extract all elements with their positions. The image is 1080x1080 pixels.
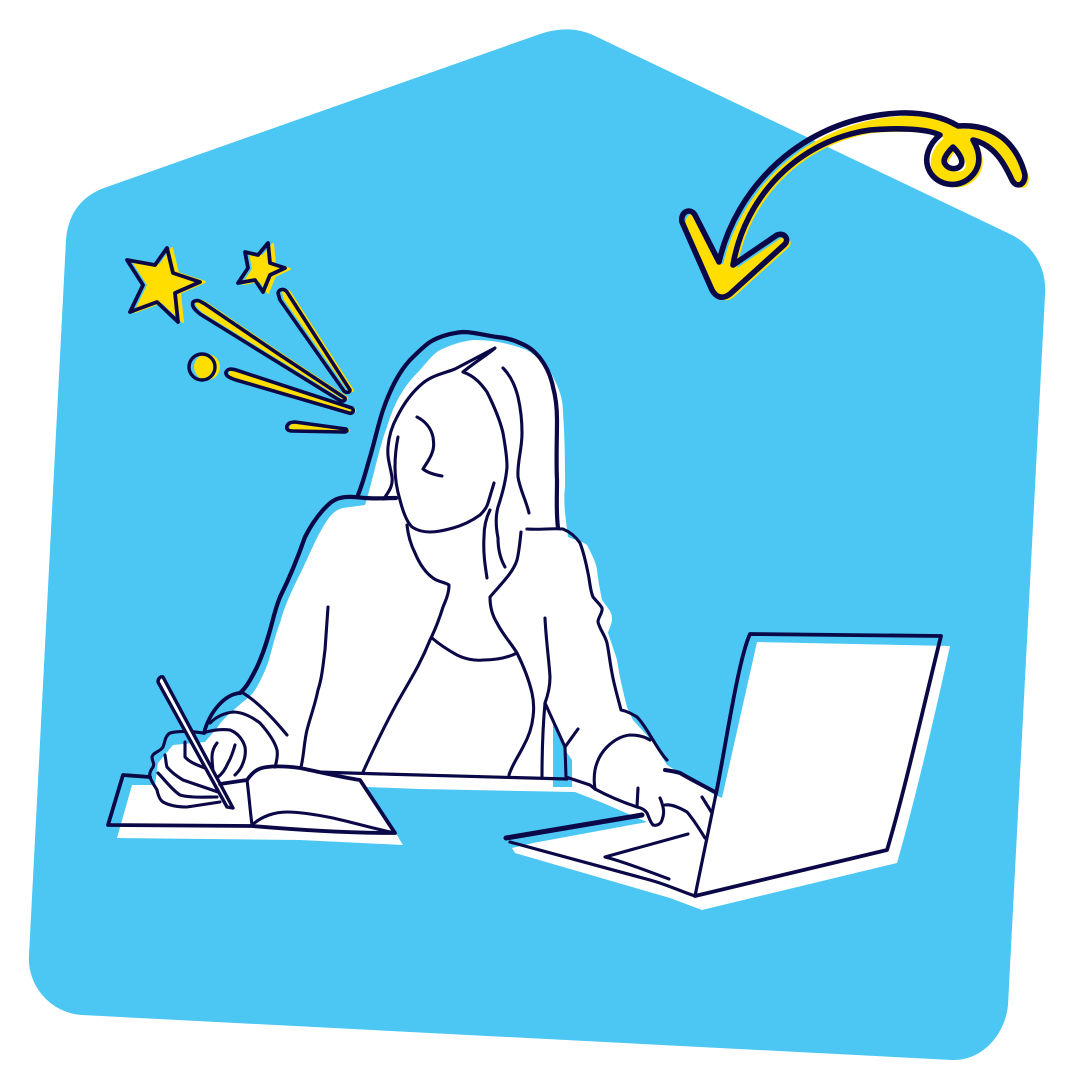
arrow outline bbox=[682, 113, 1025, 297]
right hand bbox=[594, 735, 650, 789]
jacket shoulders and sleeve bbox=[240, 497, 396, 693]
figure: white offset fill of woman, notebook and laptop bbox=[117, 340, 950, 910]
arrow yellow fill bbox=[686, 116, 1029, 300]
icon: small yellow star bbox=[238, 243, 290, 293]
laptop bbox=[695, 634, 941, 896]
figure: blue gap beside arm bbox=[553, 723, 572, 787]
table line bbox=[317, 772, 567, 779]
pen bbox=[158, 677, 233, 808]
face and nose bbox=[417, 417, 442, 476]
hair strands and face edge bbox=[385, 348, 507, 567]
hair outline bbox=[358, 332, 558, 528]
icon: yellow spark dashes and dot bbox=[189, 289, 356, 432]
writing hand bbox=[210, 712, 277, 767]
icon: large yellow star bbox=[127, 248, 205, 322]
figure: woman line art bbox=[108, 332, 941, 896]
notebook bbox=[108, 766, 395, 833]
icon: curved yellow arrow bbox=[682, 113, 1029, 300]
